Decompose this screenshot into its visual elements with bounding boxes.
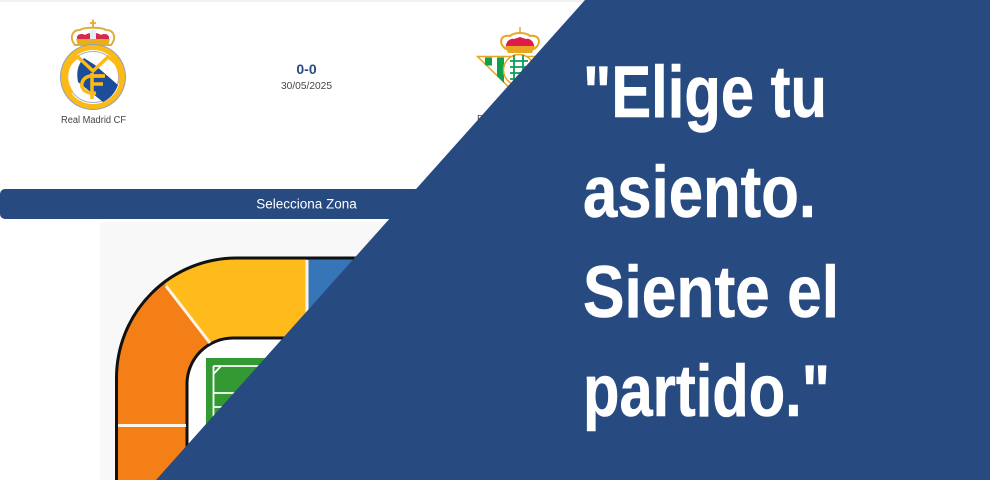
icon: Real Madrid crest: [60, 20, 126, 110]
panel: stadium map: [100, 222, 600, 480]
text: away team name: R: [477, 114, 484, 125]
stadium outline: [116, 258, 400, 480]
text: line 3: Siente el: [583, 252, 839, 333]
text: match date: 30/05/2025: [281, 80, 332, 92]
stand: yellow section: [164, 258, 307, 344]
text: line 1: "Elige tu: [583, 52, 827, 133]
headline: [583, 52, 839, 432]
button: zone selector: Selecciona Zona: [256, 196, 357, 212]
text: line 2: asiento.: [583, 152, 816, 233]
text: home team name: Real Madrid CF: [61, 115, 126, 126]
pitch surround: [187, 338, 400, 480]
text: score: 0-0: [296, 61, 317, 77]
pitch: [206, 358, 406, 480]
button: zone selector: [0, 189, 600, 219]
stand: orange section: [116, 283, 210, 480]
section dividers: [118, 260, 307, 426]
stand: blue section: [307, 258, 400, 338]
text: line 4: partido.": [583, 351, 830, 432]
icon: Real Betis crest: [478, 27, 560, 98]
